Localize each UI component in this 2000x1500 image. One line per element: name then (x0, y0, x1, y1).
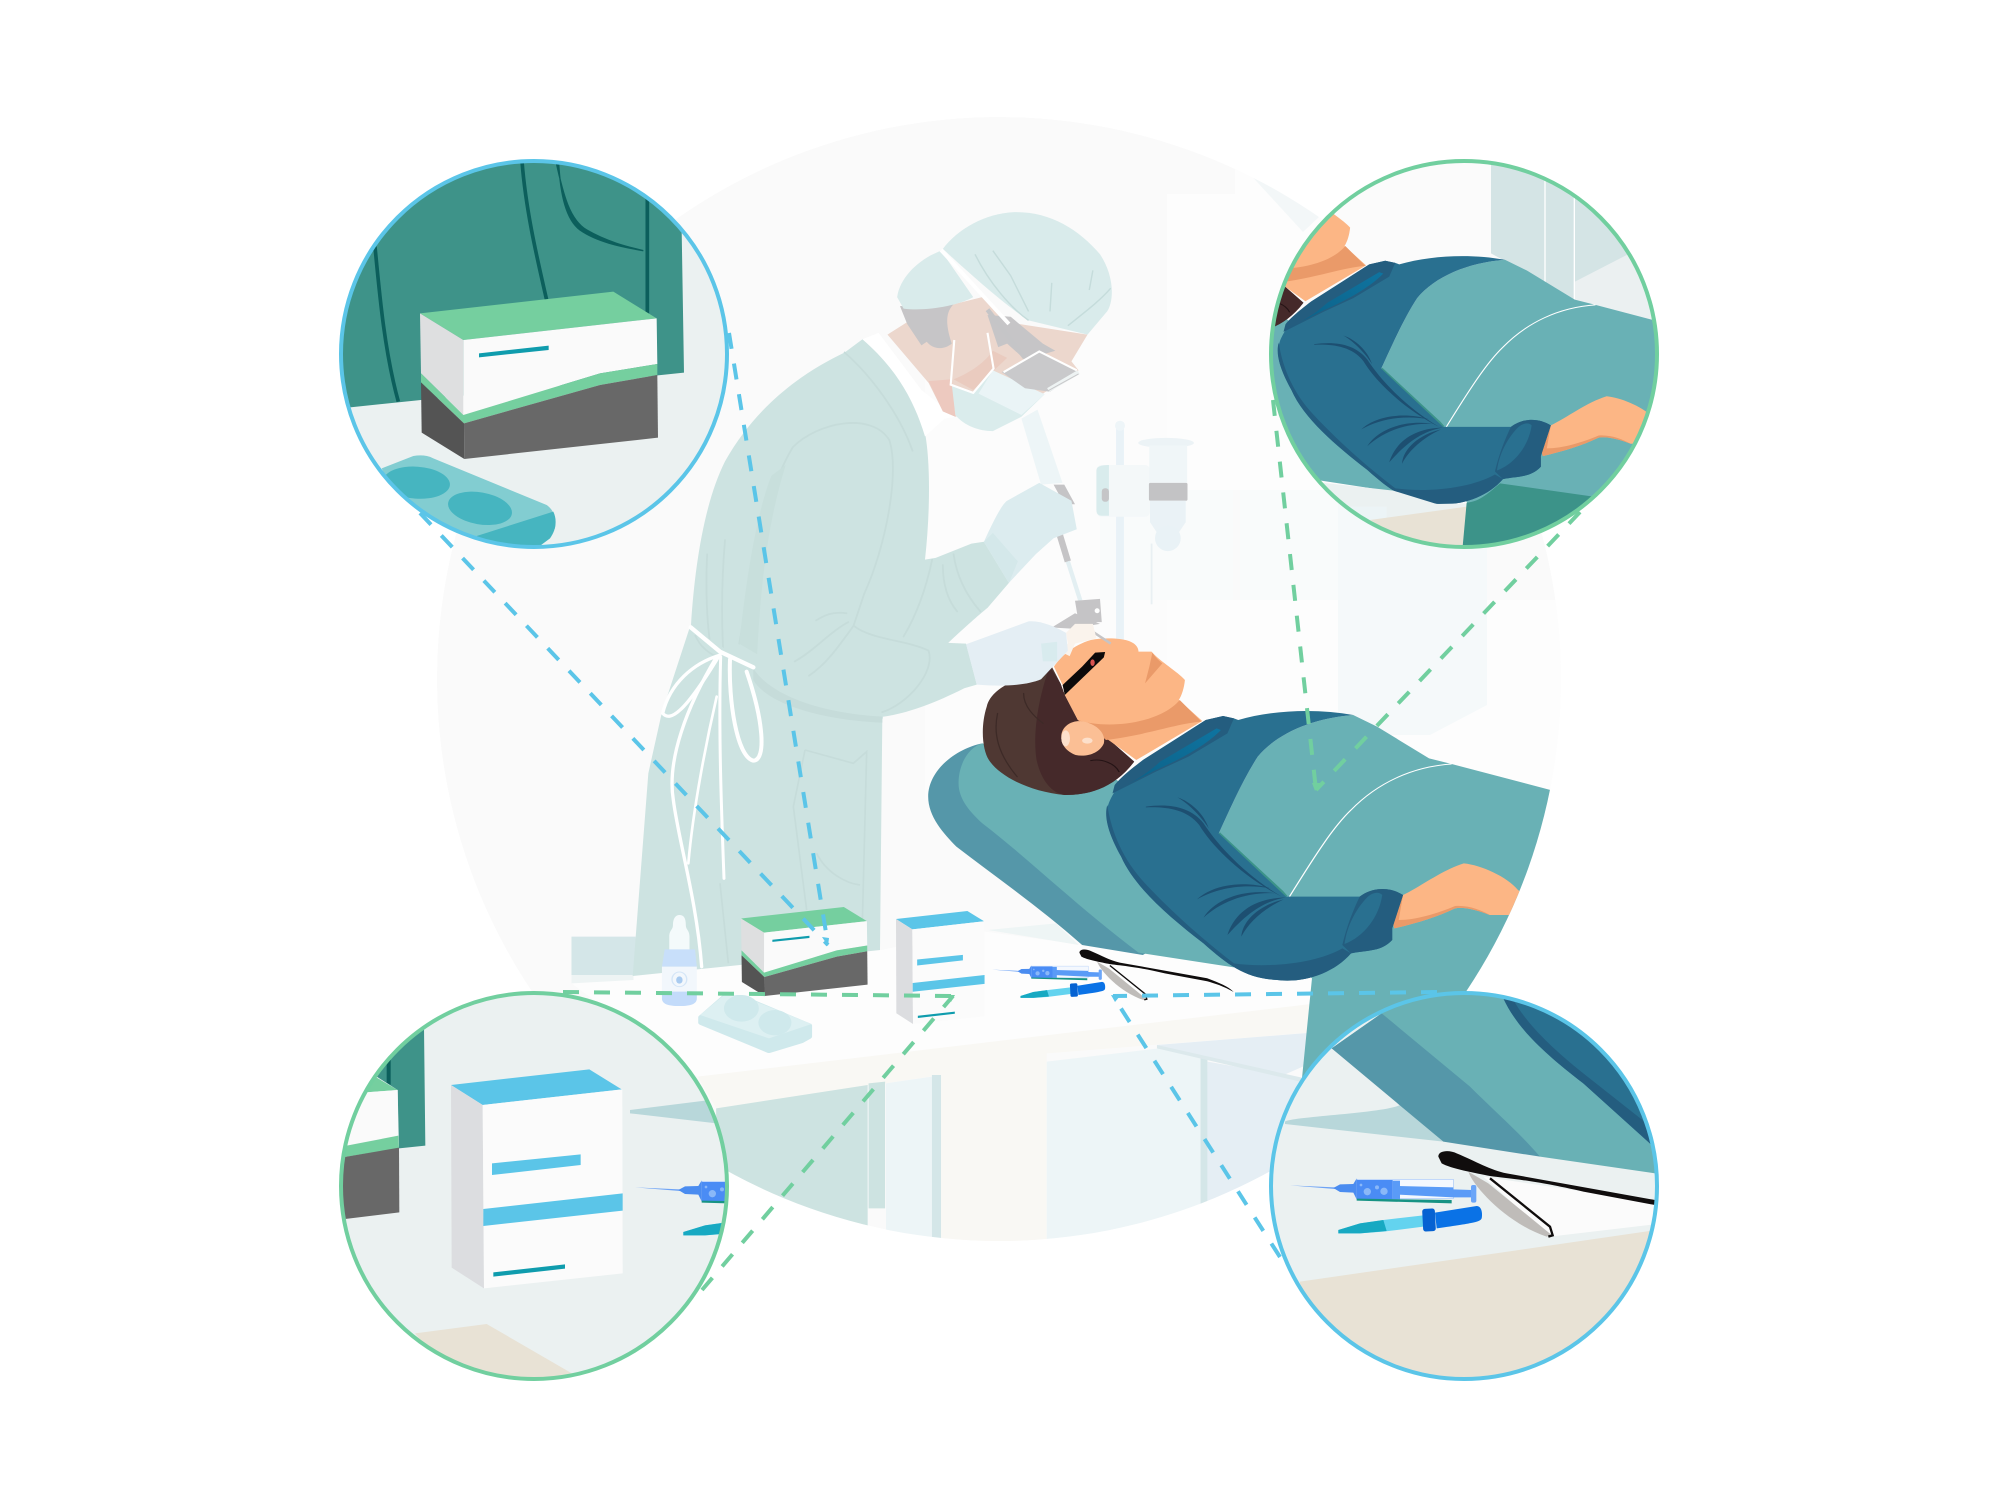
arrowheads (822, 783, 1321, 1002)
blue-topped medicine box (896, 911, 985, 1024)
tray (382, 455, 556, 536)
curtain (333, 153, 684, 407)
faded IV stand (1096, 421, 1194, 644)
gown folds (844, 352, 846, 353)
gown (691, 339, 1009, 719)
green-topped medicine box (741, 907, 868, 996)
blue connectors to green box (420, 333, 828, 945)
gown ties (663, 627, 762, 967)
syringe in hand (1021, 410, 1062, 485)
patient on reclined chair (928, 638, 1550, 1078)
hair (900, 304, 954, 348)
background disc (437, 117, 1561, 1241)
box (420, 292, 658, 459)
surgical mask (952, 370, 1045, 431)
curtain and cropped green box (377, 1027, 425, 1148)
table (572, 924, 1306, 1239)
magnifier: patient detail (1269, 159, 1659, 549)
dropper bottle (662, 915, 697, 1006)
faded room walls and window (925, 110, 1607, 800)
surgeon gown skirt with pocket and ties (633, 627, 882, 976)
magnifying loupes (1002, 354, 1076, 392)
lower glove (966, 621, 1068, 686)
blue connectors to instruments (1113, 992, 1437, 1257)
syringes and forceps (992, 949, 1234, 1000)
instrument head (1052, 599, 1102, 629)
box (451, 1069, 623, 1288)
green connectors to patient (1273, 400, 1580, 790)
syringes (636, 1180, 725, 1236)
face and neck (887, 297, 1087, 417)
green connectors to blue box (563, 992, 953, 1290)
ceramic tray (700, 995, 812, 1051)
magnifier: blue box detail (339, 991, 729, 1381)
upper glove (984, 483, 1077, 583)
surgical cap (897, 251, 973, 309)
magnifier: instruments detail (1269, 991, 1659, 1381)
magnifier: green box detail (333, 153, 730, 550)
dashed connectors (420, 333, 1580, 1290)
white collar (863, 340, 926, 436)
main scene (572, 178, 1550, 1241)
surgeon (691, 212, 1112, 719)
